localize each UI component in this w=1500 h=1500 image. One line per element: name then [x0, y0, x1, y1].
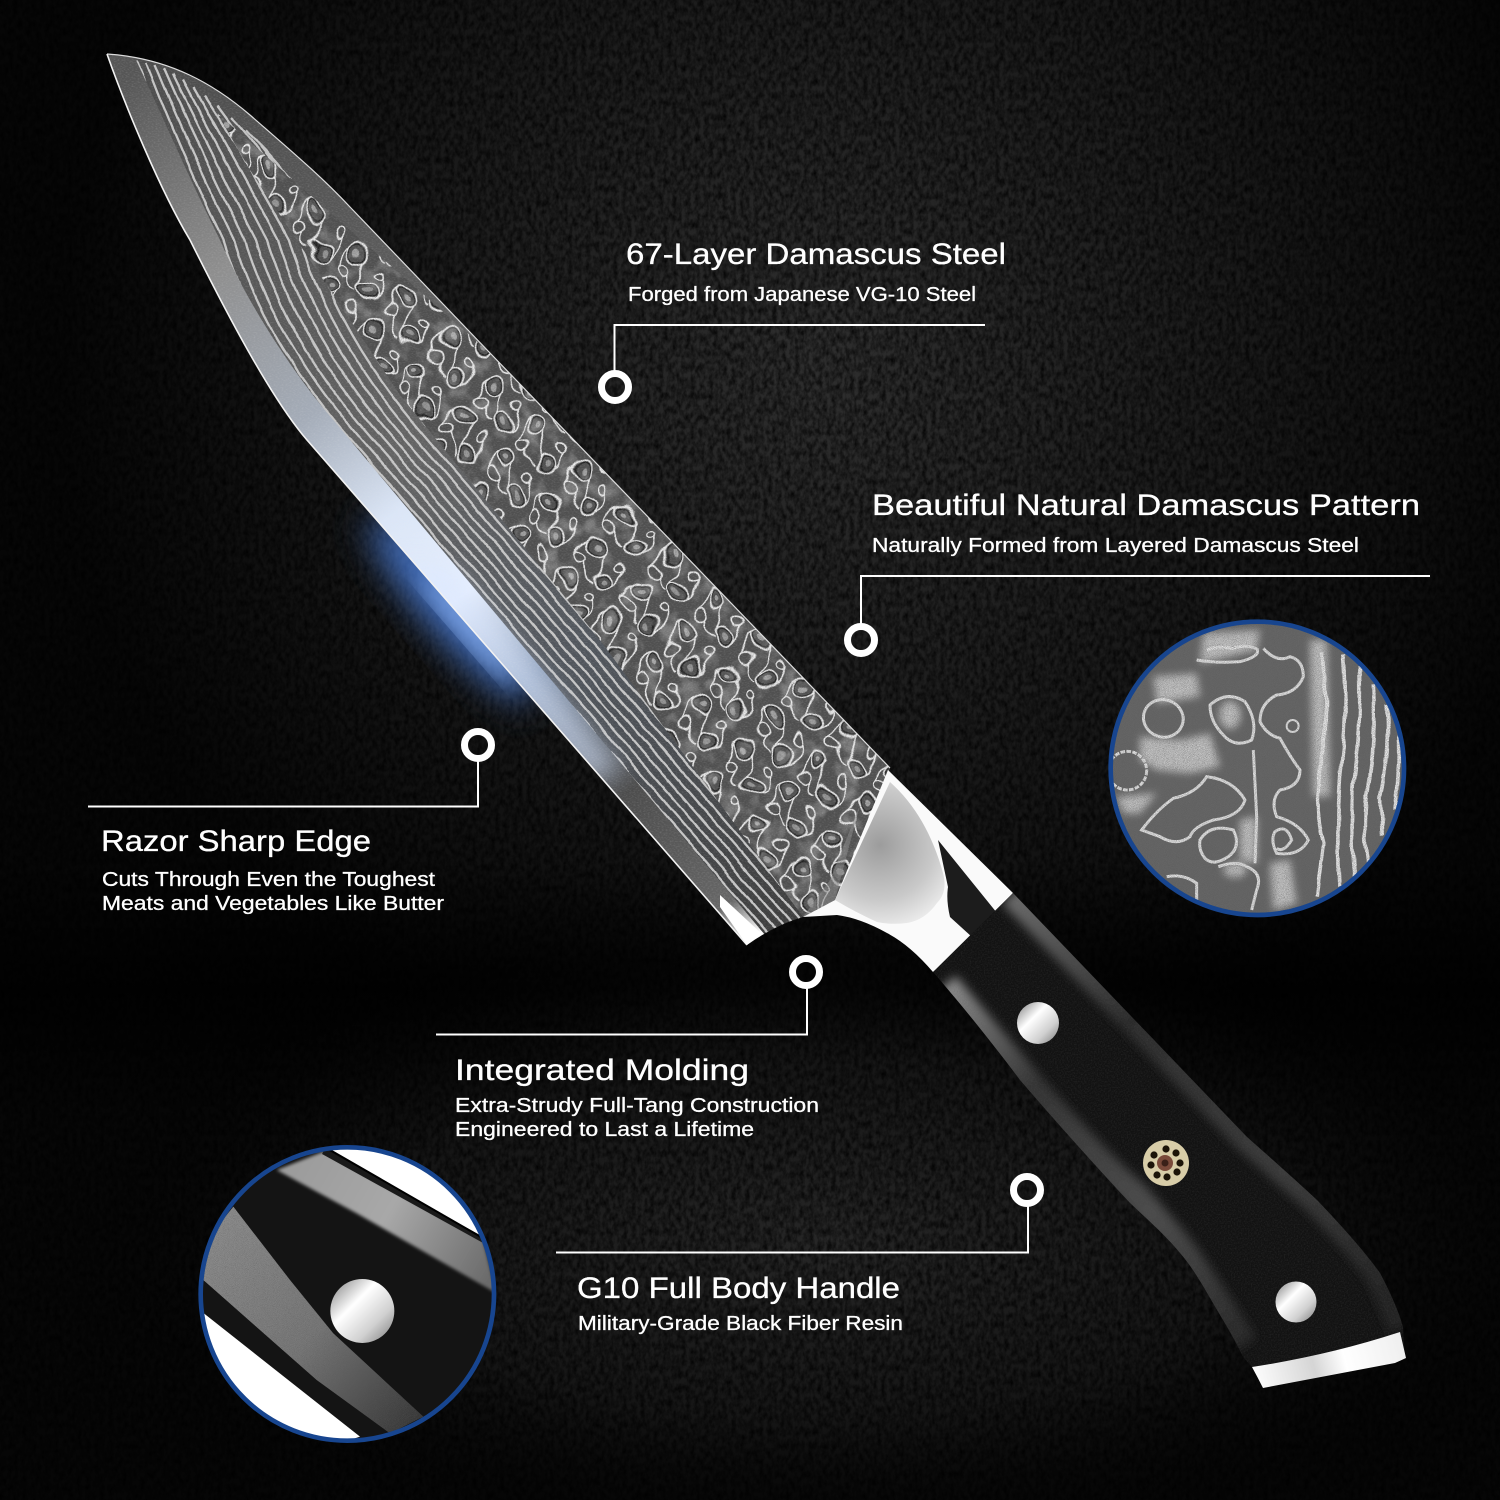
- leader line: [556, 1205, 1028, 1252]
- subtext: Naturally Formed from Layered Damascus Steel: [872, 535, 1359, 557]
- handle steel wedge bottom: [204, 1314, 360, 1438]
- ring marker: [1014, 1176, 1040, 1204]
- callout: natural damascus pattern: [848, 489, 1430, 654]
- subtext: Military-Grade Black Fiber Resin: [578, 1313, 903, 1335]
- blade bevel near cutting edge: [107, 54, 765, 945]
- subtext line 2: Meats and Vegetables Like Butter: [102, 893, 444, 915]
- blade layered stripes: [137, 60, 888, 945]
- blue light glow along blade edge: [354, 500, 550, 716]
- handle lower textured band: [204, 1206, 423, 1432]
- bolster grey reflection: [835, 782, 945, 924]
- ring marker: [848, 626, 874, 654]
- pattern light blotches: [1117, 630, 1330, 910]
- blade highlight: [448, 556, 626, 788]
- chef knife: [100, 40, 1420, 1400]
- detail circle blue border: [201, 1147, 494, 1441]
- pattern ring outlines: [1108, 646, 1308, 910]
- handle: [933, 893, 1404, 1366]
- handle upper bevel: [1013, 893, 1403, 1327]
- blade damascus ring pattern: [218, 114, 890, 917]
- handle lower textured bevel: [945, 985, 1245, 1345]
- blade heel bright corner: [720, 895, 761, 945]
- bolster: [803, 770, 1013, 972]
- detail circle: handle close-up: [198, 1145, 496, 1443]
- callout: integrated molding: [436, 958, 820, 1141]
- callout: g10 handle: [556, 1176, 1040, 1335]
- rivet: top: [1017, 1002, 1059, 1044]
- rivet: bottom: [1276, 1282, 1316, 1322]
- leader line: [861, 576, 1430, 625]
- subtext: Cuts Through Even the Toughest: [102, 869, 435, 891]
- callout: razor sharp edge: [88, 732, 492, 915]
- handle rivet: [330, 1279, 394, 1343]
- leader line: [436, 987, 807, 1034]
- detail circle blue border: [1111, 622, 1404, 915]
- handle upper grey band: [277, 1152, 497, 1293]
- subtext line 2: Engineered to Last a Lifetime: [455, 1119, 754, 1141]
- heading: Razor Sharp Edge: [101, 825, 371, 858]
- butt cap: [1252, 1332, 1406, 1388]
- subtext: Extra-Strudy Full-Tang Construction: [455, 1095, 819, 1117]
- blade spine highlight: [107, 54, 890, 768]
- leader line: [614, 325, 985, 372]
- detail circle: damascus pattern close-up: [1108, 619, 1406, 918]
- handle steel wedge top: [332, 1150, 479, 1234]
- heading: 67-Layer Damascus Steel: [626, 238, 1006, 271]
- ring marker: [464, 732, 492, 758]
- callout: 67-layer damascus steel: [602, 238, 1006, 400]
- blade edge highlight: [107, 54, 747, 945]
- blade: [108, 54, 890, 945]
- pattern wavy stripes: [1317, 653, 1399, 897]
- heading: G10 Full Body Handle: [577, 1272, 900, 1305]
- ring marker: [602, 374, 628, 400]
- bolster dark facet: [938, 840, 997, 937]
- ring marker: [792, 958, 820, 986]
- heading: Beautiful Natural Damascus Pattern: [872, 489, 1420, 522]
- subtext: Forged from Japanese VG-10 Steel: [628, 284, 976, 306]
- leader line: [88, 760, 478, 806]
- heading: Integrated Molding: [455, 1054, 749, 1087]
- rivet: mosaic pin: [1143, 1140, 1189, 1186]
